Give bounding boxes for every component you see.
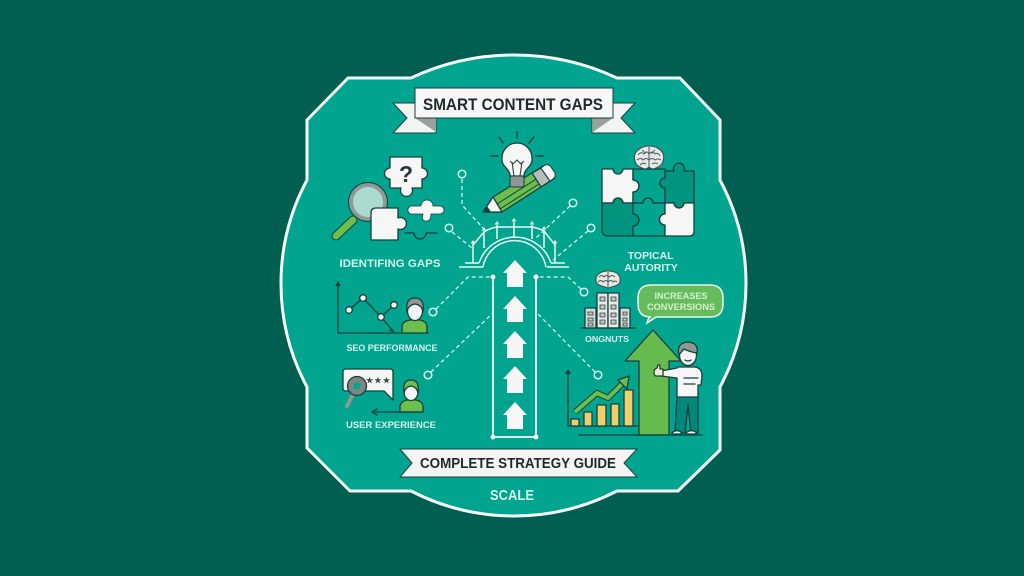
title banner [393, 88, 635, 133]
ladder frame with arrows [490, 260, 538, 440]
icon: large green arrow [579, 330, 702, 435]
bottom banner [400, 449, 637, 477]
label: SEO performance: SEO PERFORMANCE [346, 343, 438, 353]
chart: rising bars [565, 369, 638, 426]
callout: increases conversions [638, 285, 723, 323]
panel: main badge [281, 55, 746, 516]
icon: buildings [581, 293, 635, 328]
icon: brain above puzzle [634, 146, 664, 170]
icon: brain above buildings [596, 271, 620, 288]
icon: identifying gaps puzzle and magnifier [336, 157, 444, 240]
label: identifying gaps: IDENTIFING GAPS [340, 258, 440, 270]
icon: topical authority puzzle [602, 163, 694, 236]
bottom banner: COMPLETE STRATEGY GUIDE [420, 456, 616, 472]
label: topical authority: AUTORITY [624, 262, 678, 274]
callout: increases conversions: CONVERSIONS [647, 302, 715, 312]
icon: identifying gaps puzzle and magnifier: ? [399, 161, 413, 187]
label: scale: SCALE [490, 488, 534, 504]
label: topical authority: TOPICAL [628, 250, 674, 262]
label: user experience: USER EXPERIENCE [346, 420, 436, 431]
icon: user experience review [343, 369, 423, 415]
icon: light bulb and pencil [483, 132, 555, 212]
title banner: SMART CONTENT GAPS [423, 95, 603, 114]
icon: bridge [459, 218, 569, 267]
icon: user experience review: ★★★ [366, 376, 391, 385]
callout: increases conversions: INCREASES [654, 291, 708, 301]
connector lines and nodes [424, 170, 602, 379]
label: buildings caption: ONGNUTS [585, 334, 629, 344]
icon: man giving thumbs up [654, 342, 702, 434]
icon: SEO performance chart [335, 281, 428, 333]
